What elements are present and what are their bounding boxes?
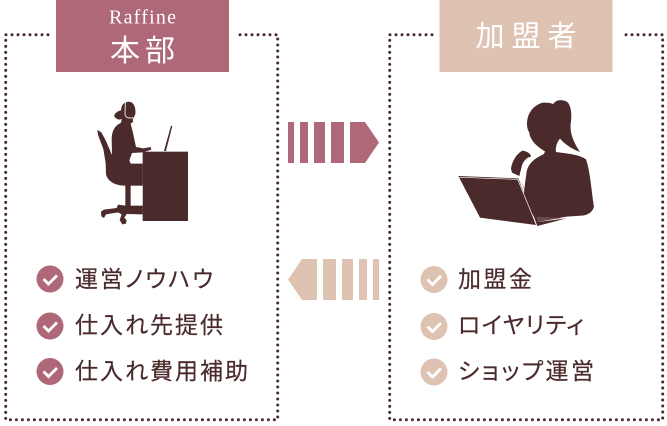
- heading: franchisee: 加盟者: [476, 21, 576, 53]
- item: royalty: ロイヤリティ: [458, 312, 584, 338]
- panel: headquarters: [6, 0, 278, 420]
- heading: Raffine headquarters: Raffine: [109, 6, 176, 28]
- item: supply: 仕入れ先提供: [75, 312, 223, 338]
- list: headquarters offerings: [36, 266, 248, 385]
- heading: Raffine headquarters: [56, 0, 229, 72]
- icon: woman at laptop: [458, 100, 594, 226]
- item: membership fee: 加盟金: [458, 266, 532, 292]
- item: cost subsidy: 仕入れ費用補助: [75, 358, 248, 384]
- arrow: headquarters to member: [288, 122, 379, 163]
- item: shop operation: ショップ運営: [458, 358, 594, 384]
- heading: franchisee: [440, 0, 612, 72]
- item: know-how: 運営ノウハウ: [75, 266, 213, 292]
- heading: Raffine headquarters: 本部: [110, 35, 175, 68]
- list: franchisee payments: [420, 266, 594, 386]
- arrow: member to headquarters: [288, 259, 379, 300]
- icon: operator at desk: [97, 102, 188, 224]
- item: membership fee: [420, 266, 532, 293]
- panel: franchisee: [390, 0, 663, 420]
